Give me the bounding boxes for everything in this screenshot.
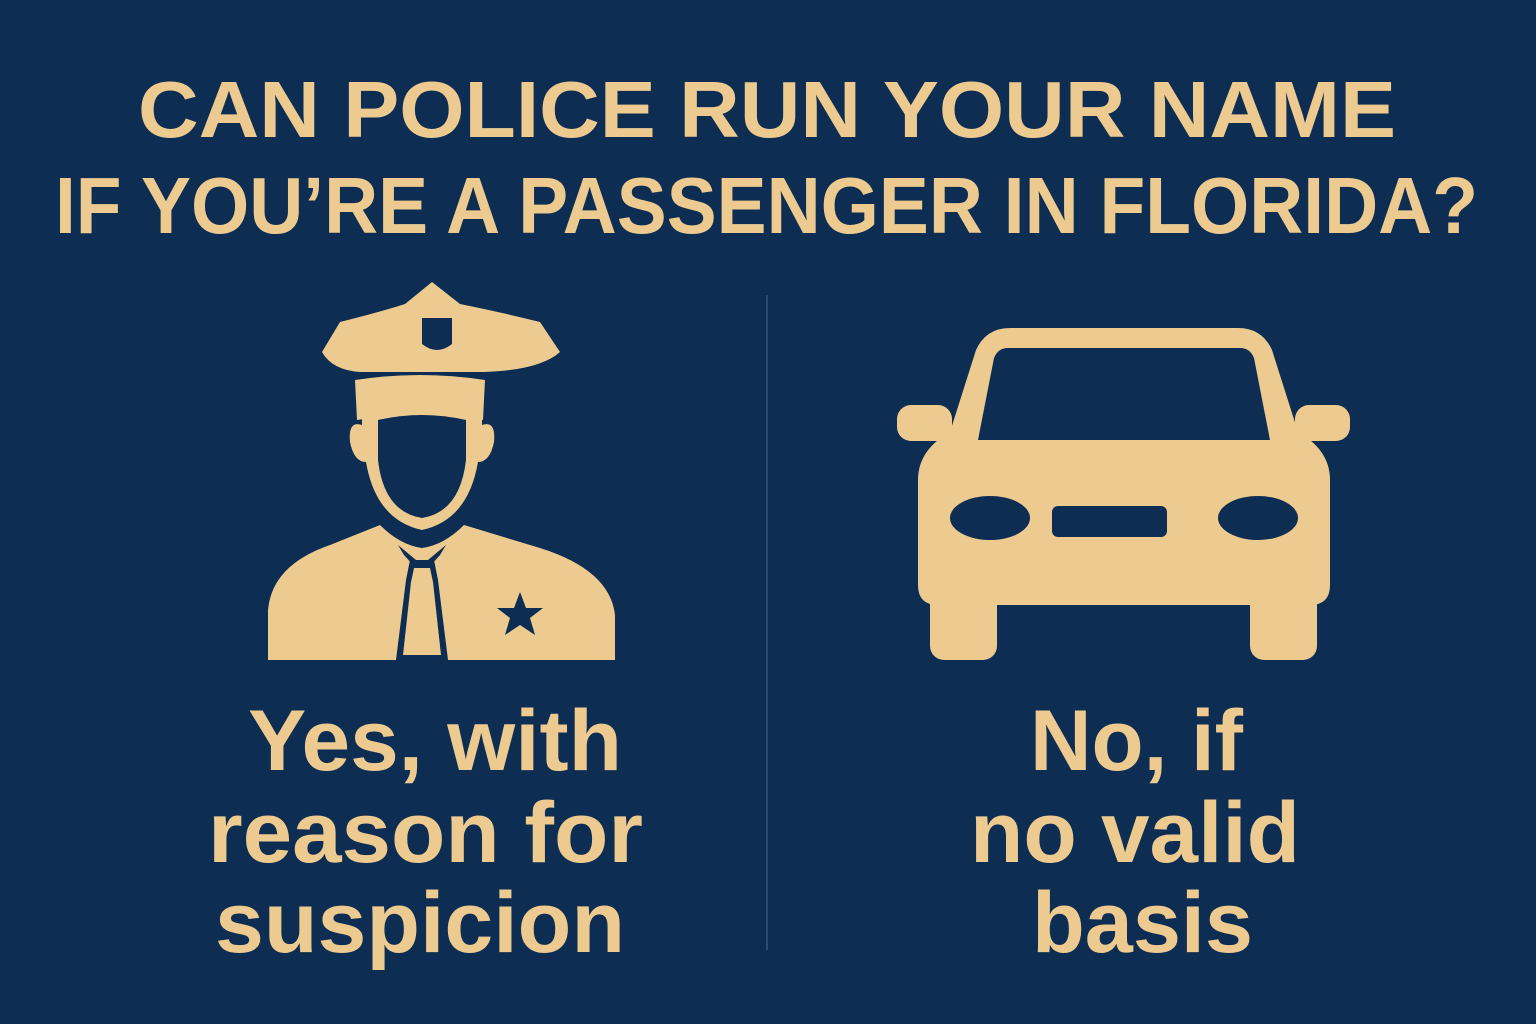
text: yes answer: suspicion <box>215 875 625 971</box>
title: CAN POLICE RUN YOUR NAME <box>138 65 1396 154</box>
text: yes answer: reason for <box>208 785 643 881</box>
text: no answer: no valid <box>970 785 1300 881</box>
title: IF YOU’RE A PASSENGER IN FLORIDA? <box>55 161 1478 250</box>
icon: police officer <box>268 282 615 660</box>
text: yes answer <box>208 693 643 971</box>
text: no answer <box>970 693 1300 971</box>
text: no answer: No, if <box>1030 693 1243 789</box>
title <box>55 65 1478 250</box>
text: yes answer: Yes, with <box>248 693 622 789</box>
text: no answer: basis <box>1032 875 1253 971</box>
icon: car <box>897 328 1350 660</box>
